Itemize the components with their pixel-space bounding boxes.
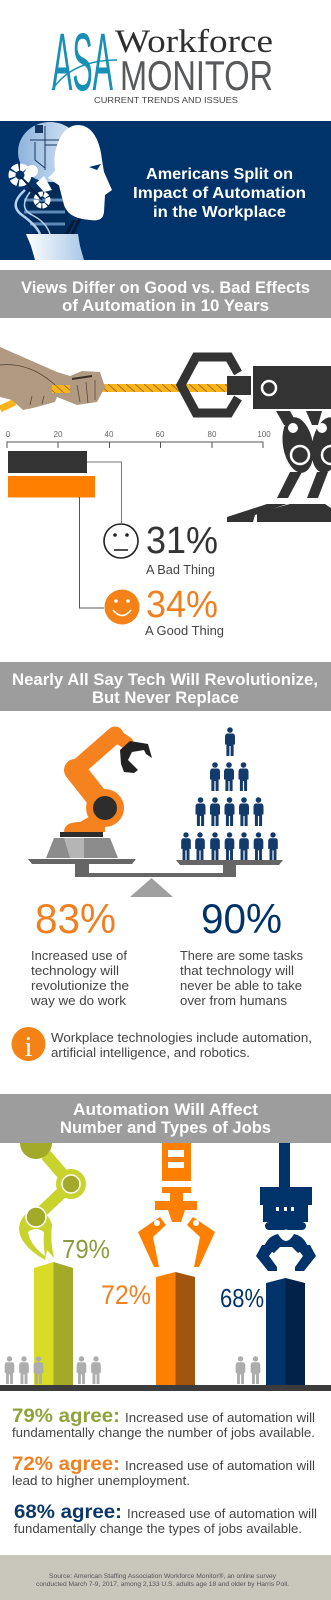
- illustration: hand vs robot tug of war: [0, 347, 331, 522]
- icon: robot claw and arm: [181, 357, 331, 522]
- title text: Americans Split on: [146, 166, 293, 183]
- icon: info: i: [24, 1031, 33, 1063]
- heading: automation will affect: Automation Will Affect: [73, 1101, 259, 1119]
- axis: 100: [257, 430, 271, 439]
- heading: automation will affect: Number and Types of Jobs: [60, 1119, 271, 1137]
- heading: views differ: Views Differ on Good vs. Bad Effects: [21, 279, 310, 297]
- icon: robot head: [12, 122, 112, 260]
- title text: in the Workplace: [153, 204, 286, 221]
- stat: 83%: 83%: [35, 895, 116, 942]
- stat: 31% bad: 31%: [146, 520, 218, 562]
- ground line: [0, 1385, 331, 1391]
- icon: info: [12, 1027, 46, 1063]
- icon group: people pyramid: [181, 727, 278, 860]
- icon: navy claw: [256, 1143, 316, 1271]
- column: 68%: [266, 1278, 305, 1385]
- icon: neutral face: [104, 524, 138, 558]
- icon: green robot arm: [19, 1143, 86, 1260]
- axis: 60: [156, 430, 165, 439]
- axis: 0: [6, 430, 11, 439]
- stat label: 79%: 79%: [62, 1234, 110, 1264]
- scale: left pan: [28, 859, 136, 864]
- heading: views differ: [0, 270, 331, 318]
- logo word: Workforce: Workforce: [115, 24, 273, 60]
- text block: 72% agree: 72% agree:: [12, 1453, 120, 1475]
- stat: 90%: [180, 895, 303, 1008]
- stat: 90%: There are some tasks: [180, 949, 303, 963]
- stat: 90%: that technology will: [180, 964, 294, 978]
- heading: nearly all: But Never Replace: [92, 689, 239, 707]
- icon: happy face: [104, 590, 140, 624]
- icon group: grey people: [5, 1356, 260, 1384]
- scale: beam: [75, 864, 236, 877]
- text block: 79% agree: Increased use of automation will: [125, 1411, 315, 1425]
- stat: 90%: over from humans: [180, 994, 287, 1008]
- text block: 68% agree: [14, 1501, 317, 1536]
- bar: bad thing: [8, 451, 87, 473]
- scale: fulcrum: [130, 878, 173, 897]
- bar chart: good vs bad: [6, 430, 271, 638]
- callout: workplace technologies: Workplace technologies include automation,: [51, 1031, 312, 1045]
- text block: 68% agree: 68% agree:: [14, 1501, 122, 1523]
- text block: 79% agree: fundamentally change the number of jobs available.: [12, 1426, 315, 1440]
- logo: ASA Workforce Monitor: ASA: [52, 17, 113, 108]
- axis: 80: [208, 430, 217, 439]
- text block: 72% agree: lead to higher unemployment.: [12, 1474, 190, 1488]
- bar: good thing: [8, 476, 95, 498]
- text block: 79% agree: 79% agree:: [12, 1405, 120, 1427]
- icon: robot arm: [46, 735, 152, 858]
- stat: 34% good: A Good Thing: [145, 624, 224, 638]
- heading: nearly all: Nearly All Say Tech Will Revolutionize,: [12, 671, 318, 689]
- icon: orange claw: [138, 1143, 215, 1267]
- logo tagline: CURRENT TRENDS AND ISSUES: [94, 96, 238, 105]
- rope: [0, 384, 228, 409]
- column: 79%: [34, 1262, 73, 1385]
- heading: nearly all: [0, 662, 331, 711]
- title text: Impact of Automation: [133, 185, 306, 202]
- callout: workplace technologies: artificial intelligence, and robotics.: [51, 1046, 250, 1060]
- scale: right pan: [176, 860, 283, 865]
- logo word: Monitor: MONITOR: [120, 52, 273, 99]
- heading: views differ: of Automation in 10 Years: [62, 297, 269, 315]
- axis: 20: [54, 430, 63, 439]
- stat: 34% good: 34%: [146, 584, 218, 626]
- stat: 90%: never be able to take: [180, 979, 302, 993]
- stat: 83%: way we do work: [30, 994, 127, 1008]
- text block: 79% agree: [12, 1405, 315, 1440]
- text block: 72% agree: Increased use of automation will: [125, 1459, 315, 1473]
- footer: source: Source: American Staffing Association Workforce Monitor®, an online survey: [49, 1573, 277, 1580]
- stat label: 72%: 72%: [101, 1280, 151, 1310]
- connector: good: [80, 497, 104, 608]
- stat: 83%: revolutionize the: [31, 979, 129, 993]
- footer: source: conducted March 7-9, 2017, among 2,133 U.S. adults age 18 and older by Harris Poll.: [36, 1581, 289, 1588]
- heading: automation will affect: [0, 1094, 331, 1143]
- stat: 83%: Increased use of: [31, 949, 128, 963]
- text block: 68% agree: Increased use of automation will: [127, 1507, 317, 1521]
- axis: [6, 430, 271, 448]
- logo swoosh: [52, 60, 117, 90]
- panel: title banner: [0, 121, 331, 260]
- stat label: 68%: 68%: [220, 1283, 264, 1313]
- stat: 31% bad: A Bad Thing: [146, 563, 215, 577]
- footer: source: [0, 1555, 331, 1600]
- text block: 68% agree: fundamentally change the types of jobs available.: [14, 1522, 302, 1536]
- icon: human hand: [0, 347, 105, 410]
- connector: bad: [87, 462, 122, 523]
- illustration: balance scale: [28, 727, 283, 897]
- chart: job impact columns: [0, 1143, 331, 1391]
- stat: 83%: [30, 895, 129, 1008]
- stat: 90%: 90%: [201, 895, 282, 942]
- axis: 40: [105, 430, 114, 439]
- callout: workplace technologies: [12, 1027, 312, 1063]
- title text: [133, 166, 306, 221]
- column: 72%: [156, 1272, 195, 1385]
- stat: 83%: technology will: [31, 964, 119, 978]
- text block: 72% agree: [12, 1453, 315, 1488]
